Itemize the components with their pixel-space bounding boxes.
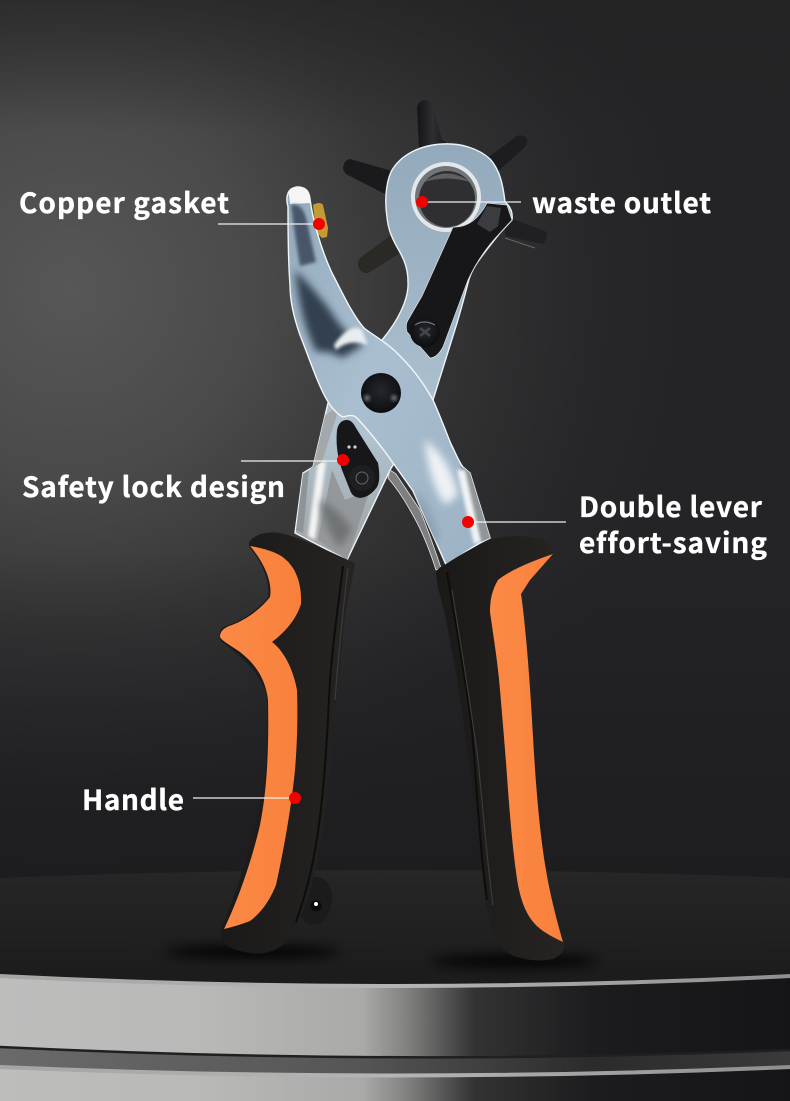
leader line: [218, 223, 319, 225]
back sliver under front arm: [388, 470, 441, 570]
label second line: effort-saving: [579, 522, 767, 562]
pivot rivet: [361, 373, 401, 413]
left handle orange grip: [220, 546, 301, 929]
marker dot: [313, 218, 325, 230]
platform: [0, 870, 790, 1101]
roller on left handle: [295, 875, 335, 927]
marker dot: [337, 454, 349, 466]
platform side band: [0, 977, 790, 1057]
pliers: [219, 100, 564, 960]
lock plate: [337, 420, 379, 498]
right handle groove: [447, 572, 487, 900]
lever tab highlight: [477, 206, 501, 232]
hole ring: [411, 162, 481, 232]
punch tubes: [343, 100, 547, 273]
left handle: [219, 532, 355, 954]
label: Handle: [82, 779, 184, 819]
label: Copper gasket: [19, 182, 229, 222]
head and back arm: [295, 144, 512, 560]
copper gasket: [313, 203, 328, 238]
platform top surface: [0, 870, 790, 986]
front jaw arm: [287, 187, 490, 567]
back arm reflections: [296, 405, 370, 560]
leader line: [422, 201, 521, 203]
marker dot: [289, 792, 301, 804]
shadow: right handle: [431, 955, 599, 967]
lever screw: [410, 317, 440, 347]
shadow: left handle: [164, 946, 340, 958]
right handle orange grip: [490, 554, 563, 942]
black lever plate: [406, 203, 512, 358]
label: Safety lock design: [22, 466, 285, 506]
callout: safety lock design: [22, 454, 349, 506]
platform base band: [0, 1067, 790, 1101]
jaw reflections: [288, 187, 490, 545]
right handle: [436, 536, 564, 960]
leader line: [241, 460, 343, 462]
left handle groove: [296, 566, 343, 922]
label: waste outlet: [532, 182, 711, 222]
leader line: [193, 797, 295, 799]
callout: waste outlet: [416, 182, 711, 222]
label: Double lever: [579, 486, 763, 526]
leader line: [468, 521, 566, 523]
callout: double lever effort-saving: [462, 486, 767, 562]
platform lower strip: [0, 1047, 790, 1076]
callout: handle: [82, 779, 301, 819]
marker dot: [462, 516, 474, 528]
callout: copper gasket: [19, 182, 325, 230]
marker dot: [416, 196, 428, 208]
